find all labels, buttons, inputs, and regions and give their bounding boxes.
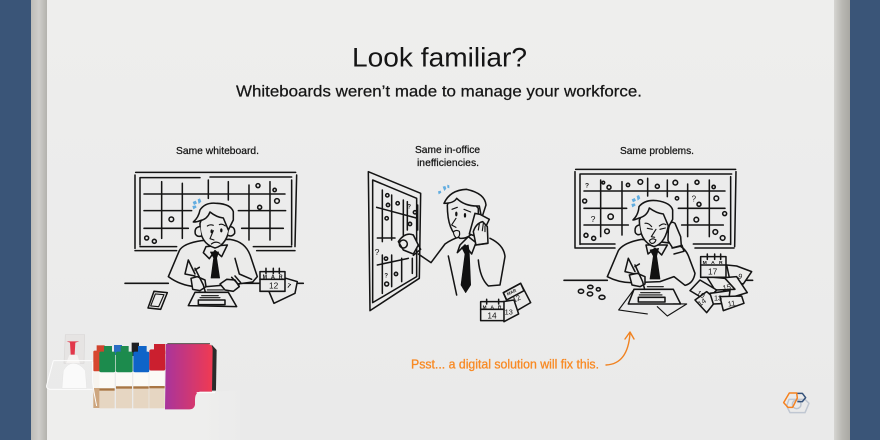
orange note: Psst... a digital solution will fix this. [411, 358, 599, 372]
full whiteboard [575, 169, 736, 248]
calendars: MAR [506, 287, 518, 297]
logo [784, 393, 809, 413]
man [607, 195, 695, 289]
markers [93, 343, 165, 408]
angled whiteboard [368, 172, 421, 311]
eraser [165, 344, 217, 409]
angled whiteboard: ? [407, 204, 411, 210]
panel: man at desk with whiteboard [125, 172, 303, 309]
calendars: 14 [487, 311, 497, 321]
caption: same problems: Same problems. [620, 145, 694, 157]
coins [578, 285, 605, 299]
phone [148, 291, 167, 309]
wall whiteboard [135, 172, 297, 251]
calendars [481, 283, 531, 322]
caption: same whiteboard: Same whiteboard. [176, 145, 259, 157]
paper on desk [188, 290, 237, 307]
full whiteboard: ? [591, 214, 596, 224]
subtitle: Whiteboards weren’t made to manage your workforce. [236, 84, 642, 100]
man [398, 185, 505, 295]
panel: man at wall whiteboard on phone [368, 172, 531, 322]
title: Look familiar? [352, 42, 527, 72]
calendar pile [690, 254, 752, 313]
desk edge [125, 281, 303, 286]
calendar pile: 9 [737, 271, 744, 281]
arrow [606, 332, 634, 365]
caption: same in-office inefficiencies: inefficiencies. [417, 157, 479, 169]
desk edge [564, 278, 753, 283]
caption: same in-office inefficiencies: Same in-office [415, 144, 480, 156]
calendar pile: MAR [703, 260, 723, 266]
calendar [260, 268, 297, 303]
full whiteboard: ? [692, 195, 697, 204]
calendar pile: 17 [708, 267, 718, 277]
spray bottle [62, 335, 87, 388]
calendar pile: 13 [714, 294, 722, 303]
angled whiteboard: ? [384, 273, 388, 279]
calendar pile: 10 [695, 288, 707, 300]
papers on desk [619, 287, 687, 316]
tray outline [47, 361, 93, 389]
calendar pile: 14 [696, 296, 708, 308]
tray body [47, 390, 240, 440]
angled whiteboard: ? [375, 247, 380, 257]
calendar pile: 11 [727, 298, 736, 309]
calendar: 7 [286, 283, 292, 291]
calendar: MAR [263, 275, 283, 281]
calendar: 12 [269, 281, 279, 291]
calendars: MAR [483, 304, 502, 309]
calendar pile: 15 [722, 282, 732, 293]
calendars: 12 [511, 293, 522, 304]
panel: stressed man at desk [564, 169, 753, 316]
calendars: 13 [505, 307, 513, 316]
man [168, 198, 257, 292]
marker tray [47, 335, 217, 409]
full whiteboard: ? [585, 182, 589, 189]
